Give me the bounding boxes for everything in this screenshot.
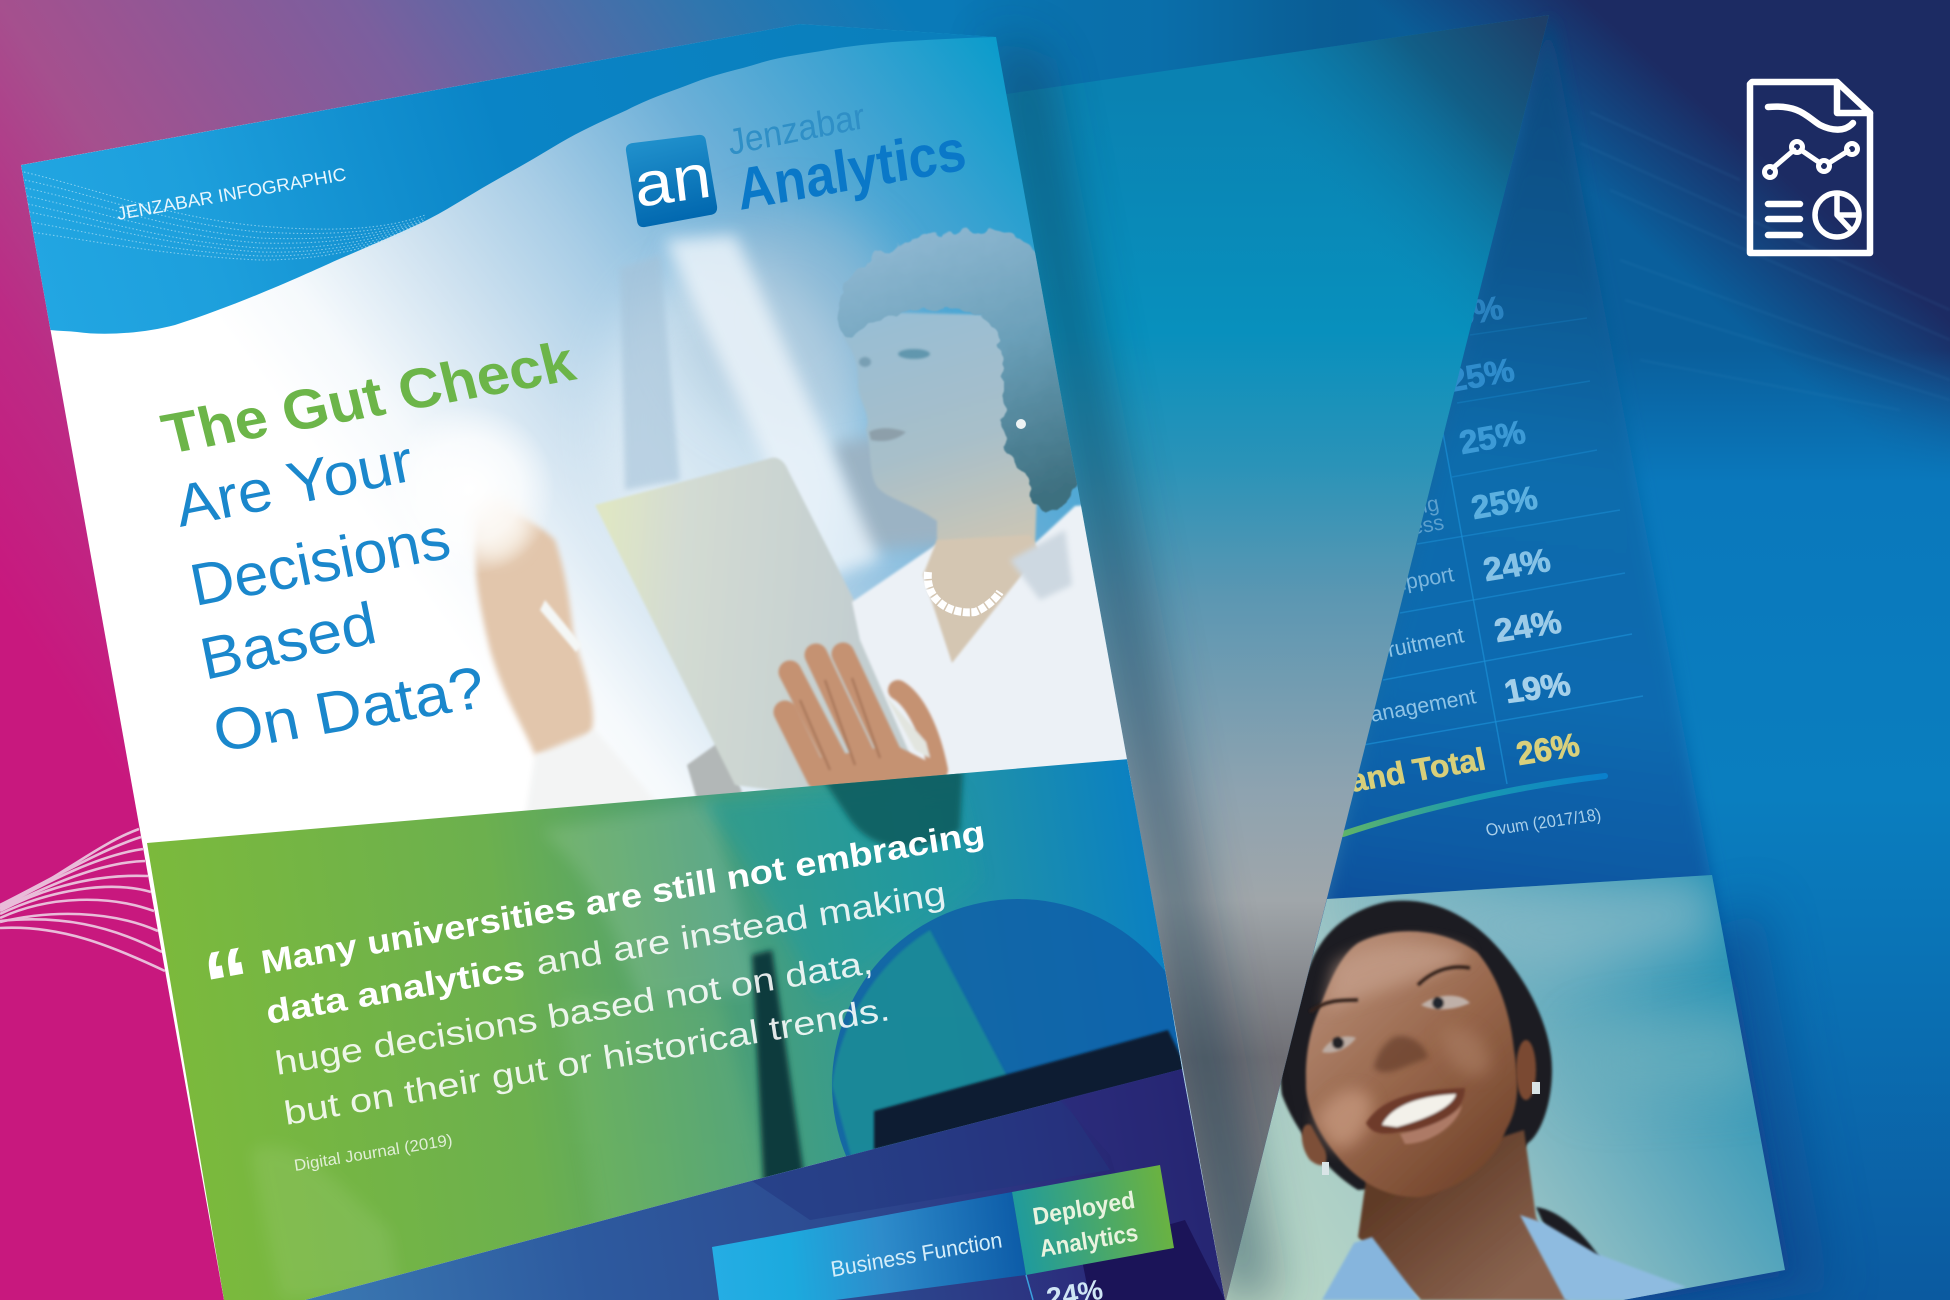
title blue lines bbox=[180, 449, 480, 749]
pearl necklace bbox=[928, 572, 1000, 612]
top wave band bbox=[21, 24, 996, 334]
table function labels bbox=[1348, 491, 1478, 730]
tag line: JENZABAR INFOGRAPHIC bbox=[115, 163, 348, 224]
photo: smiling woman bbox=[1226, 875, 1785, 1300]
quote lines: and are instead making bbox=[534, 875, 948, 983]
table percentages: 19% bbox=[1501, 666, 1573, 710]
dotted wave texture bbox=[24, 172, 425, 260]
legend lines bbox=[1768, 204, 1800, 235]
title blue lines: On Data? bbox=[208, 654, 491, 765]
title blue lines: Decisions bbox=[185, 505, 456, 619]
title blue lines: Are Your bbox=[169, 427, 419, 540]
icon: report document with charts bbox=[1750, 82, 1870, 253]
quote mark: “ bbox=[196, 926, 261, 1038]
quote source: Digital Journal (2019) bbox=[293, 1131, 454, 1175]
title block bbox=[156, 329, 582, 765]
photo: woman with tablet bbox=[385, 210, 1150, 850]
quote lines: Many universities are still not embracing bbox=[259, 815, 987, 982]
green quote band bbox=[147, 759, 1204, 1300]
line chart bbox=[1764, 142, 1858, 178]
pie chart bbox=[1815, 193, 1859, 237]
header: deployed analytics: Analytics bbox=[1038, 1220, 1140, 1263]
source note: Ovum (2017/18) bbox=[1484, 804, 1603, 840]
title blue lines: Based bbox=[194, 589, 382, 693]
quote lines: but on their gut or historical trends. bbox=[282, 991, 892, 1133]
left hand with pen bbox=[432, 420, 596, 756]
logo wordmark: Analytics bbox=[733, 118, 970, 223]
page fold bbox=[1837, 82, 1870, 113]
decorative light rays bbox=[1580, 112, 1950, 410]
quote lines: data analytics bbox=[264, 949, 527, 1032]
logo eyebrow: Jenzabar bbox=[725, 95, 867, 163]
eyes and mouth bbox=[859, 349, 930, 441]
quote text bbox=[196, 815, 987, 1175]
document outline bbox=[1750, 82, 1870, 253]
table percentages: 25% bbox=[1468, 479, 1540, 526]
header: business function: Business Function bbox=[829, 1227, 1004, 1282]
table percentages: 25% bbox=[1456, 414, 1528, 461]
table header bbox=[712, 1165, 1174, 1300]
decorative white wave lines on the magenta edge bbox=[0, 829, 165, 971]
table function labels: Support bbox=[1378, 562, 1456, 598]
curly hair bbox=[836, 231, 1085, 509]
eyebrows bbox=[1310, 967, 1470, 1012]
nose bbox=[1374, 1036, 1428, 1072]
logo tile bbox=[626, 135, 717, 227]
face and neck bbox=[843, 312, 1040, 548]
title green: The Gut Check bbox=[156, 329, 582, 466]
panel: front page bbox=[0, 0, 1300, 1300]
table function labels: Recruitment bbox=[1348, 623, 1466, 670]
table rows bbox=[1363, 318, 1643, 784]
eyes bbox=[1322, 996, 1470, 1053]
table percentages: 24% bbox=[1480, 542, 1553, 588]
earrings bbox=[1322, 1082, 1540, 1175]
table function labels: Process bbox=[1365, 510, 1446, 547]
header: deployed analytics: Deployed bbox=[1031, 1187, 1137, 1231]
page: back document bbox=[1200, 15, 1830, 1300]
right hand on tablet bbox=[772, 641, 950, 786]
header: deployed analytics bbox=[1031, 1187, 1140, 1263]
table percentages bbox=[1432, 289, 1582, 772]
table underline bbox=[1343, 776, 1605, 834]
table function labels: Management bbox=[1351, 684, 1478, 730]
table percentages: 26% bbox=[1513, 727, 1582, 772]
trend curve bbox=[1768, 107, 1853, 130]
table percentages: 25% bbox=[1432, 289, 1506, 337]
logo letters: an bbox=[630, 141, 715, 221]
table grand total label: Grand Total bbox=[1310, 740, 1488, 805]
quote lines bbox=[259, 815, 987, 1133]
table percentages: 24% bbox=[1491, 604, 1564, 649]
table function labels: Planning bbox=[1355, 491, 1441, 529]
logo block bbox=[626, 108, 965, 228]
navy table panel bbox=[305, 1069, 1225, 1300]
quote lines: huge decisions based not on data, bbox=[273, 944, 875, 1083]
smile bbox=[1366, 1088, 1465, 1144]
drop shadow of the front page bbox=[996, 37, 1275, 1300]
light wedge overlay bbox=[1000, 15, 1549, 1300]
table percentages: 25% bbox=[1444, 352, 1517, 399]
